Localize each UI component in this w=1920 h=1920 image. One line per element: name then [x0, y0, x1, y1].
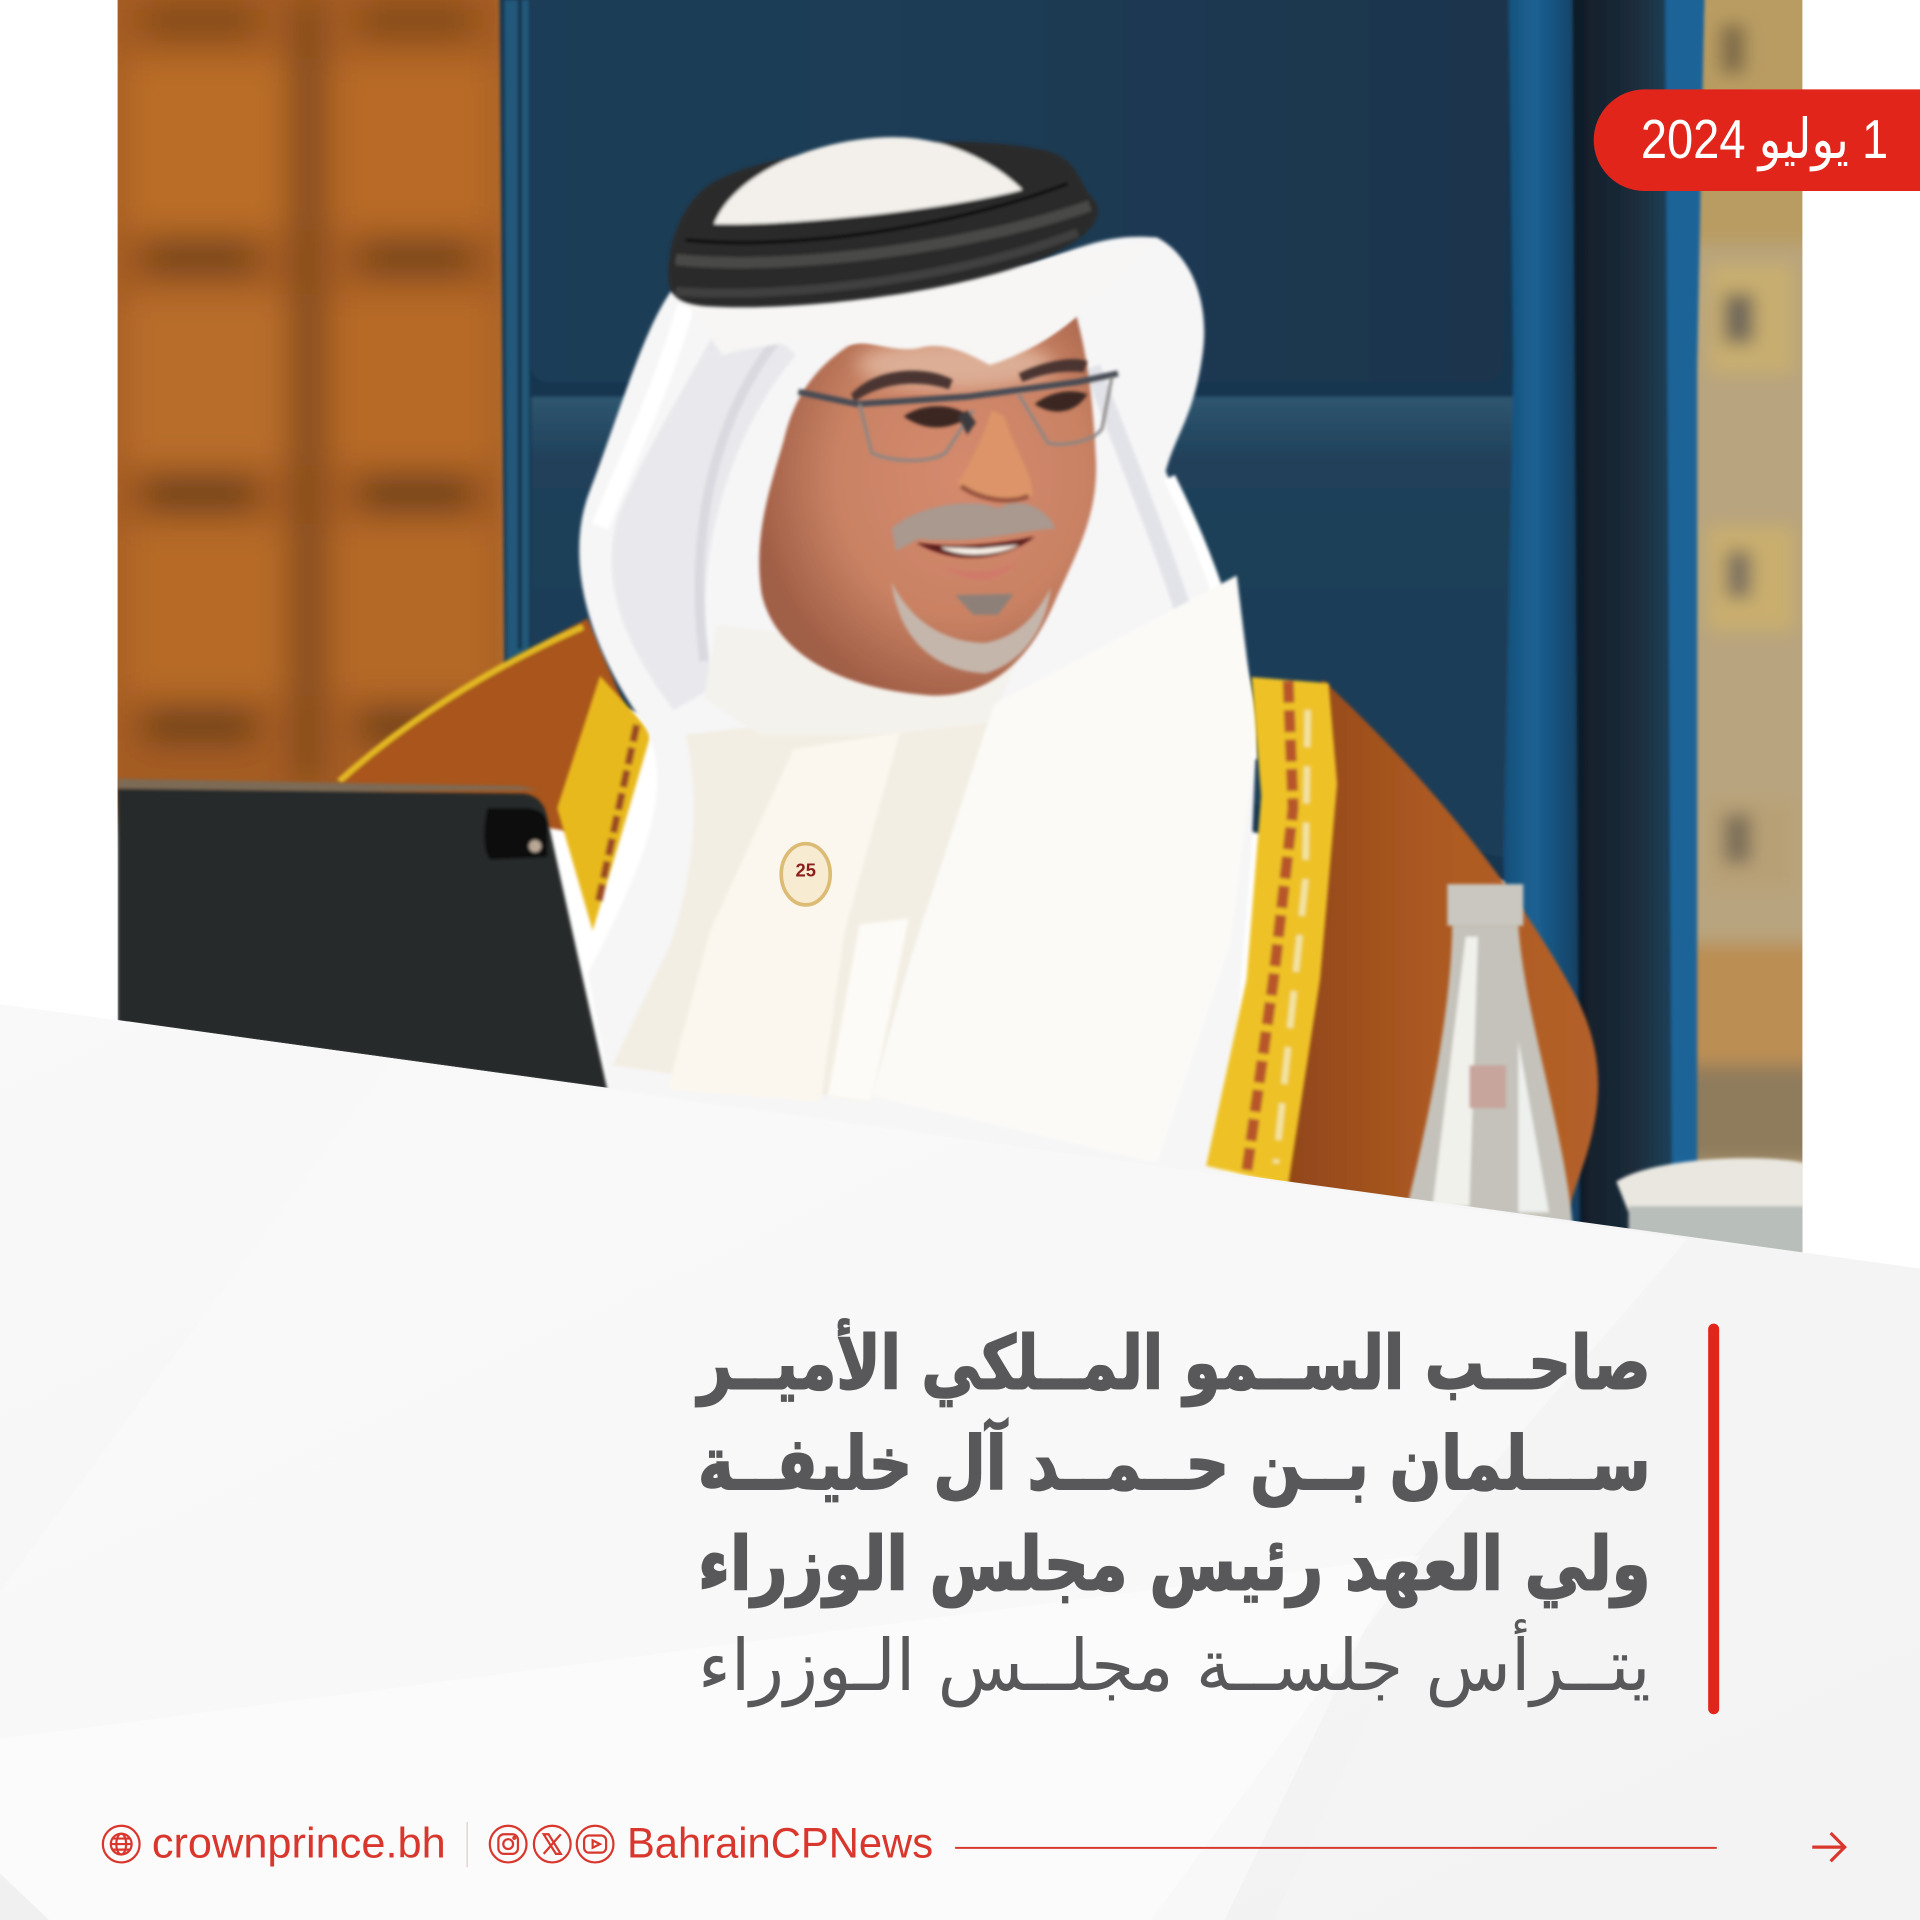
icon: globe — [103, 1826, 140, 1862]
headline line 3: ولي العهد رئيس مجلس الوزراء — [698, 1522, 1651, 1608]
tablet computer — [118, 779, 607, 1090]
water bottle — [1406, 884, 1573, 1237]
headline line 1: صاحــب الســمو المــلكي الأميــر — [695, 1319, 1651, 1407]
icon: X — [534, 1826, 571, 1862]
icon: instagram — [490, 1826, 527, 1862]
white thobe — [613, 723, 988, 1096]
date badge — [1594, 89, 1920, 191]
website: crownprince.bh — [152, 1820, 446, 1868]
goatee — [891, 582, 1051, 673]
rule line — [955, 1847, 1717, 1849]
facial features — [798, 359, 1118, 615]
panel facets — [0, 1060, 1687, 1920]
headline line 4: يتــرأس جلســة مجلــس الـوزراء — [698, 1619, 1651, 1708]
black agal — [668, 137, 1098, 307]
headband fold over forehead — [712, 250, 1077, 366]
icon: youtube — [577, 1826, 613, 1862]
brown bisht robe, right side — [1273, 680, 1598, 1249]
headline line 2: ســـلمان بــن حــمــد آل خليفــة — [698, 1418, 1651, 1507]
drinking glass — [1616, 1158, 1806, 1255]
white hanging ghutra strip — [884, 574, 1258, 1057]
date badge: 1 يوليو 2024 — [1641, 108, 1888, 171]
lapel pin 25 — [781, 844, 830, 905]
gold trim, right — [1206, 677, 1337, 1185]
headline text — [695, 1319, 1651, 1708]
thobe placket — [667, 732, 900, 1102]
wood wall panel — [86, 0, 527, 820]
lapel pin 25: 25 — [796, 860, 816, 881]
brown bisht robe, left shoulder — [337, 618, 637, 833]
right wall strip — [1694, 0, 1802, 1252]
footer bar — [103, 1820, 1845, 1868]
red accent bar — [1708, 1324, 1719, 1714]
white collar — [704, 624, 1016, 735]
arrow — [1812, 1833, 1845, 1861]
social handle: BahrainCPNews — [627, 1820, 933, 1868]
gold trim, left — [557, 676, 651, 931]
face — [759, 316, 1096, 696]
photo: Crown Prince seated in blue chair — [86, 0, 1824, 1273]
forehead light — [857, 340, 1053, 389]
divider — [467, 1822, 468, 1867]
blue leather chair — [500, 0, 1704, 1261]
bottom white panel — [0, 1004, 1920, 1920]
white headdress — [579, 237, 1257, 1176]
pocket — [828, 918, 909, 1102]
